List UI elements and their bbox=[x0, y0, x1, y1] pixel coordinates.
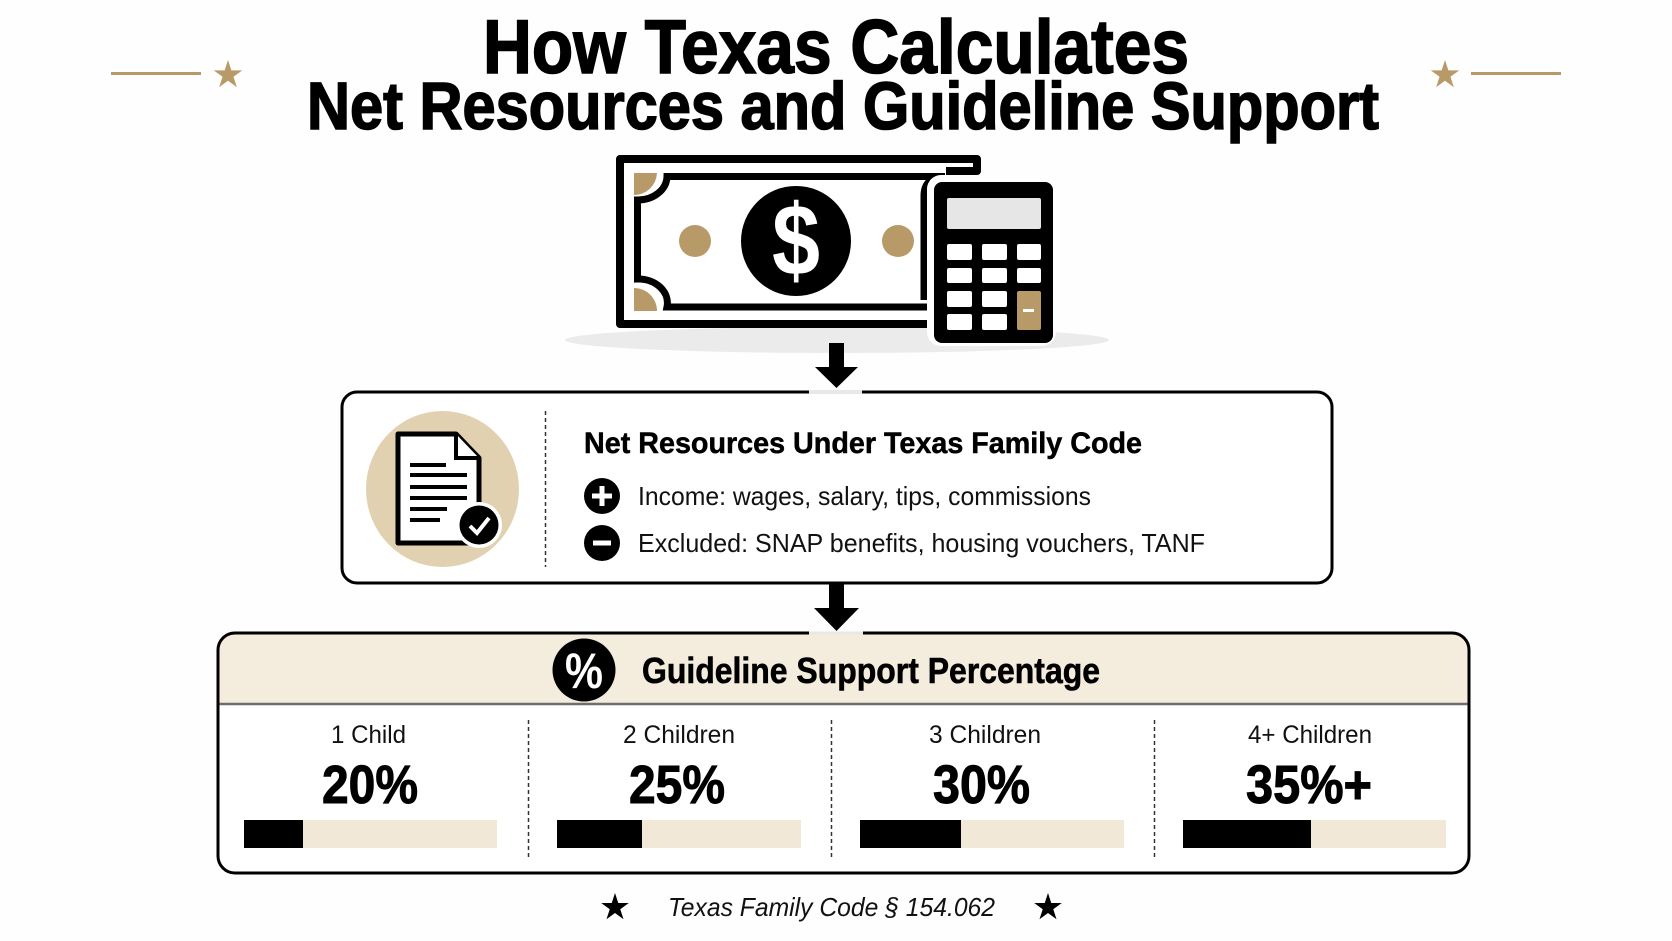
icon: money and calculator bbox=[565, 159, 1109, 353]
column: 3 children bbox=[860, 721, 1124, 848]
ornament: right star and line bbox=[1431, 60, 1561, 87]
title bbox=[307, 5, 1379, 144]
icon: calculator bbox=[927, 175, 1056, 346]
income row: Income: wages, salary, tips, commissions bbox=[638, 481, 1091, 511]
title: Net Resources and Guideline Support bbox=[307, 69, 1379, 144]
panel: net resources bbox=[342, 390, 1332, 583]
heading: guideline: Guideline Support Percentage bbox=[642, 650, 1100, 691]
column: 1 child: 1 Child bbox=[331, 721, 406, 749]
column: 2 children bbox=[557, 721, 801, 848]
arrow: icon to net resources bbox=[815, 343, 858, 388]
icon: dollar bill bbox=[620, 159, 977, 324]
column: 3 children: 30% bbox=[933, 755, 1030, 815]
column: 1 child bbox=[244, 721, 497, 848]
header band bbox=[218, 633, 1469, 704]
column: 4+ children: 35%+ bbox=[1246, 755, 1372, 815]
icon shadow bbox=[565, 327, 1109, 353]
icon: document with check bbox=[366, 411, 519, 567]
column: 4+ children bbox=[1183, 721, 1446, 848]
icon: dollar bill: $ bbox=[772, 185, 820, 297]
column: 3 children: 3 Children bbox=[929, 721, 1041, 749]
title: How Texas Calculates bbox=[483, 5, 1189, 90]
column: 4+ children: 4+ Children bbox=[1248, 721, 1372, 749]
excluded row: Excluded: SNAP benefits, housing vouchers, TANF bbox=[638, 528, 1205, 558]
footer citation: Texas Family Code § 154.062 bbox=[668, 892, 996, 922]
arrow: net resources to guideline bbox=[814, 584, 859, 631]
column: 2 children: 25% bbox=[629, 755, 725, 815]
icon: percent bbox=[552, 638, 616, 702]
ornament: left star and line bbox=[111, 60, 242, 87]
panel: guideline support percentage bbox=[218, 632, 1469, 873]
heading: net resources: Net Resources Under Texas Family Code bbox=[584, 427, 1142, 460]
column: 2 children: 2 Children bbox=[623, 721, 735, 749]
column: 1 child: 20% bbox=[322, 755, 418, 815]
icon: percent: % bbox=[565, 643, 603, 699]
